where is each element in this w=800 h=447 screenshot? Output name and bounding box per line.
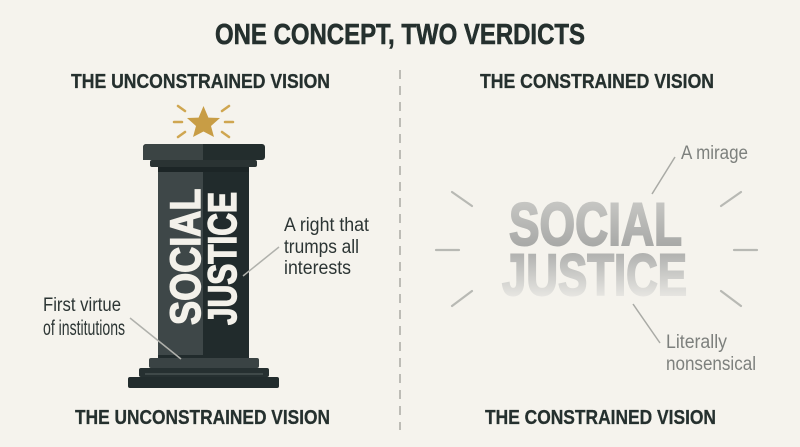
callout: a right that trumps all interests: trumps all — [284, 237, 359, 258]
faded word: social justice: SOCIAL — [509, 191, 682, 258]
pillar capital — [143, 144, 265, 167]
callout: a mirage: A mirage — [681, 143, 748, 164]
callout: a mirage — [652, 143, 748, 194]
callout: literally nonsensical: nonsensical — [666, 354, 756, 375]
callout: a right that trumps all interests: interests — [284, 258, 351, 279]
pillar base — [128, 358, 279, 388]
callout: a right that trumps all interests — [243, 215, 370, 279]
faded word: social justice — [502, 191, 687, 308]
callout: first virtue of institutions — [43, 295, 181, 359]
pillar shaft — [158, 167, 249, 359]
faded word: social justice: JUSTICE — [502, 243, 687, 308]
icon: gold star with rays — [174, 106, 233, 137]
callout: a right that trumps all interests: A right that — [284, 215, 370, 236]
pillar — [128, 144, 279, 388]
title: ONE CONCEPT, TWO VERDICTS — [215, 19, 585, 51]
pillar text: SOCIAL: SOCIAL — [162, 189, 210, 325]
callout: first virtue of institutions: of institutions — [43, 316, 125, 340]
callout: literally nonsensical — [633, 304, 756, 375]
heading: top left: THE UNCONSTRAINED VISION — [71, 71, 330, 93]
callout: literally nonsensical: Literally — [666, 332, 727, 353]
heading: top right: THE CONSTRAINED VISION — [480, 71, 714, 93]
callout: first virtue of institutions: First virtue — [43, 295, 121, 316]
radiating dashes — [436, 192, 757, 306]
heading: bottom left: THE UNCONSTRAINED VISION — [75, 407, 330, 429]
pillar text: JUSTICE: JUSTICE — [201, 192, 245, 325]
heading: bottom right: THE CONSTRAINED VISION — [485, 407, 716, 429]
